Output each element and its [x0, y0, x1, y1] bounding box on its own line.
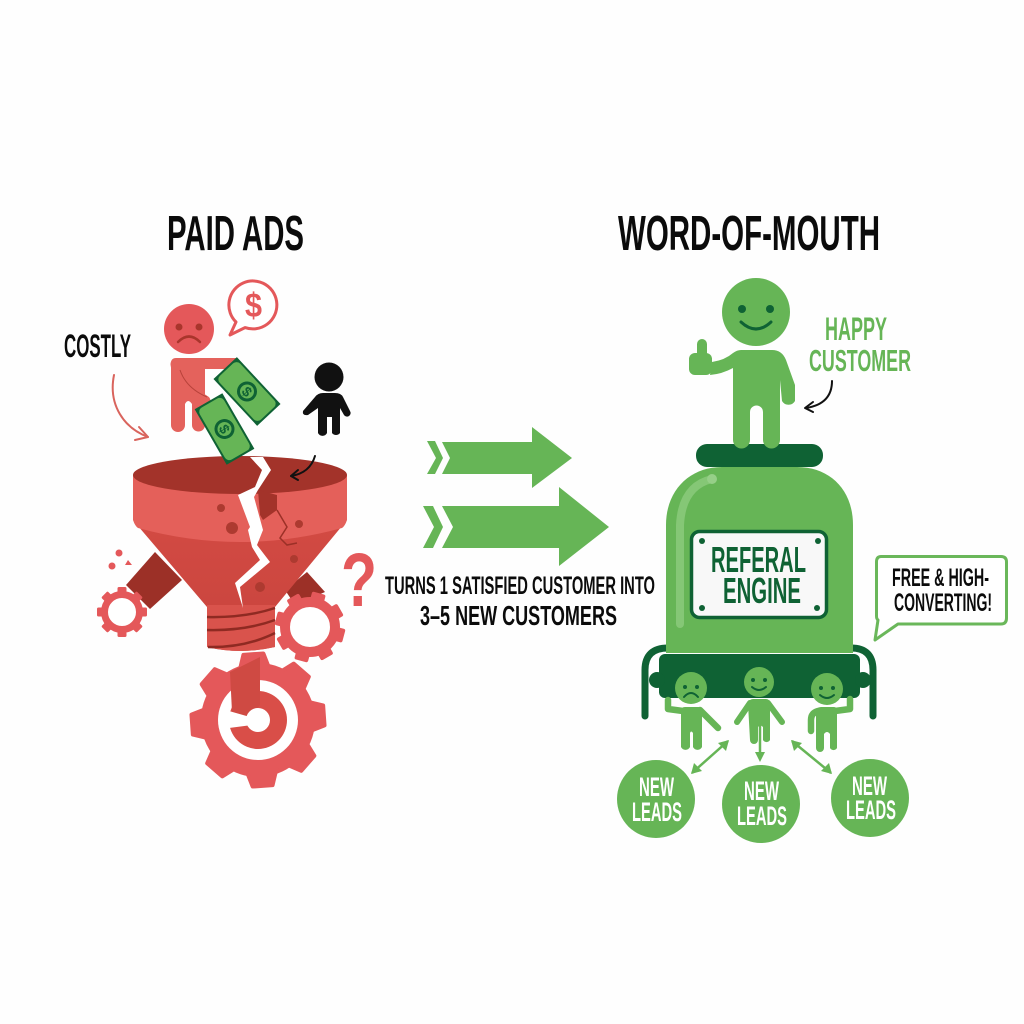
icon: jar highlight	[680, 474, 717, 624]
arrow: centre down arrow	[755, 725, 765, 762]
icon: dollar speech bubble	[229, 281, 277, 335]
arrow: lower green arrow	[423, 487, 609, 566]
text block: conversion claim: TURNS 1 SATISFIED CUSTOMER INTO	[385, 572, 655, 600]
icon: right gear	[274, 591, 346, 663]
badge: new leads centre: LEADS	[737, 801, 787, 831]
arrow: upper green arrow	[427, 427, 572, 488]
callout: free and high-converting	[875, 556, 1006, 640]
badge: new leads right: NEW	[852, 771, 887, 801]
icon: handles	[645, 648, 873, 716]
icon: right pipe	[285, 572, 325, 605]
icon: large gear	[188, 650, 328, 790]
icon: debris	[108, 550, 132, 570]
icon: smiling small customer centre	[737, 667, 782, 744]
icon: smiling small customer right	[811, 673, 850, 752]
badge: new leads centre	[722, 765, 800, 843]
icon: conveyor base	[649, 654, 871, 698]
arrow: right double arrow	[791, 740, 832, 774]
badge: new leads left	[617, 760, 695, 838]
icon: upper banknote: $	[238, 383, 256, 400]
text block: conversion claim	[385, 572, 655, 631]
badge: new leads centre: NEW	[744, 776, 779, 806]
icon: lower banknote	[195, 393, 254, 465]
sign: referral engine: REFERAL	[711, 539, 806, 580]
label: happy customer: HAPPY	[825, 311, 887, 347]
icon: happy customer	[689, 278, 795, 448]
icon: jar body	[666, 467, 853, 653]
badge: new leads left: NEW	[639, 772, 674, 802]
label: happy customer	[809, 311, 911, 378]
icon: lower banknote: $	[216, 422, 233, 437]
panel: referral engine machine	[645, 444, 873, 716]
icon: funnel	[133, 456, 347, 651]
icon: dollar speech bubble: $	[245, 287, 262, 325]
arrow: person into funnel	[291, 456, 315, 480]
sign: referral engine	[692, 532, 826, 618]
arrow: left double arrow	[691, 740, 729, 774]
icon: jar cap	[696, 444, 823, 467]
icon: upper banknote	[213, 357, 281, 426]
arrow: to happy customer	[805, 381, 832, 412]
heading: paid ads: PAID ADS	[167, 207, 304, 261]
panel: broken funnel illustration	[97, 456, 377, 790]
text block: conversion claim: 3–5 NEW CUSTOMERS	[420, 600, 617, 631]
label: happy customer: CUSTOMER	[809, 343, 911, 378]
badge: new leads left: LEADS	[632, 797, 682, 827]
badge: new leads right	[831, 759, 909, 837]
arrow: costly to customer	[113, 375, 148, 440]
icon: left gear	[97, 587, 147, 637]
icon: sad red customer	[164, 304, 237, 432]
icon: sad small customer	[668, 672, 718, 750]
icon: black person	[303, 362, 351, 436]
icon: left pipe	[126, 552, 182, 609]
badge: new leads right: LEADS	[846, 795, 896, 825]
icon: question mark: ?	[341, 538, 377, 623]
sign: referral engine: ENGINE	[723, 570, 801, 611]
label: costly: COSTLY	[64, 328, 131, 364]
